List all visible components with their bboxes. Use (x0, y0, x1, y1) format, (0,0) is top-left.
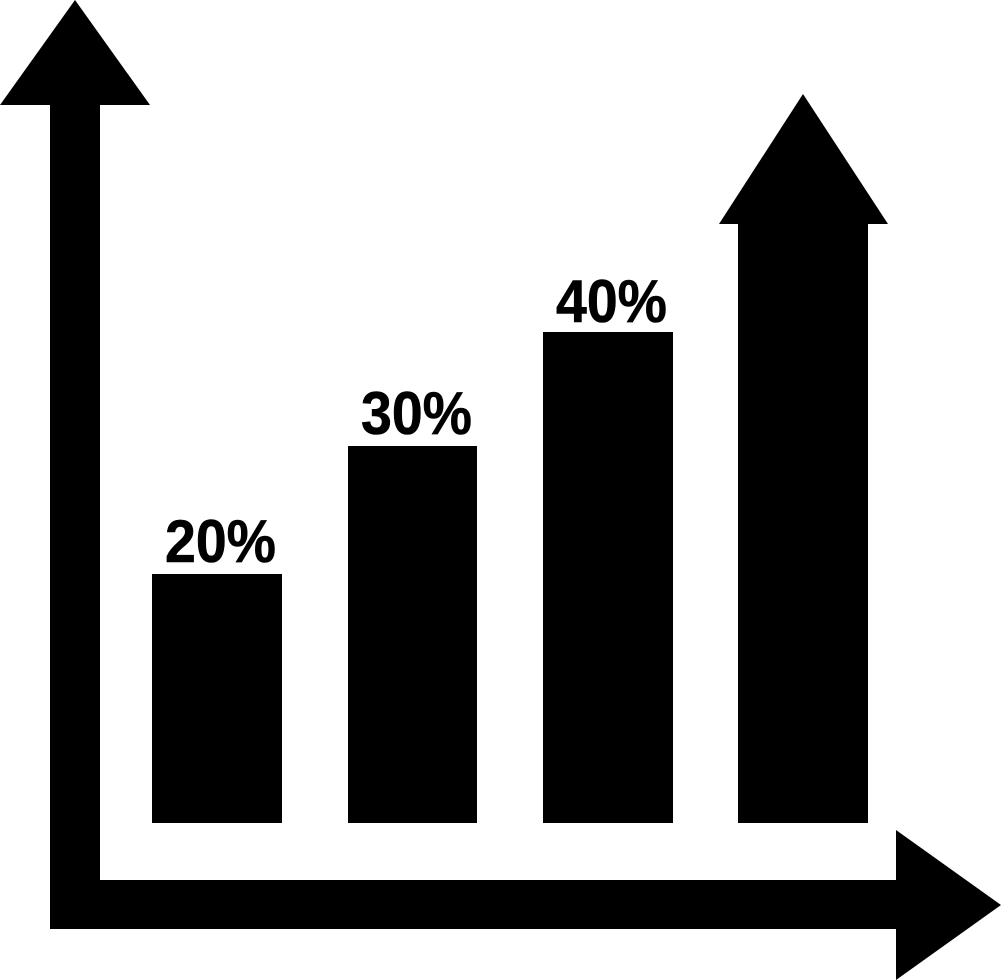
rising arrow bar (719, 94, 888, 823)
bar: 20% (152, 508, 282, 823)
bar: 30%: 30% (361, 380, 472, 447)
bar: 30% (348, 380, 477, 823)
bar: 40%: 40% (556, 268, 667, 335)
bar: 40% (543, 268, 673, 823)
bar: 20%: 20% (165, 508, 276, 575)
